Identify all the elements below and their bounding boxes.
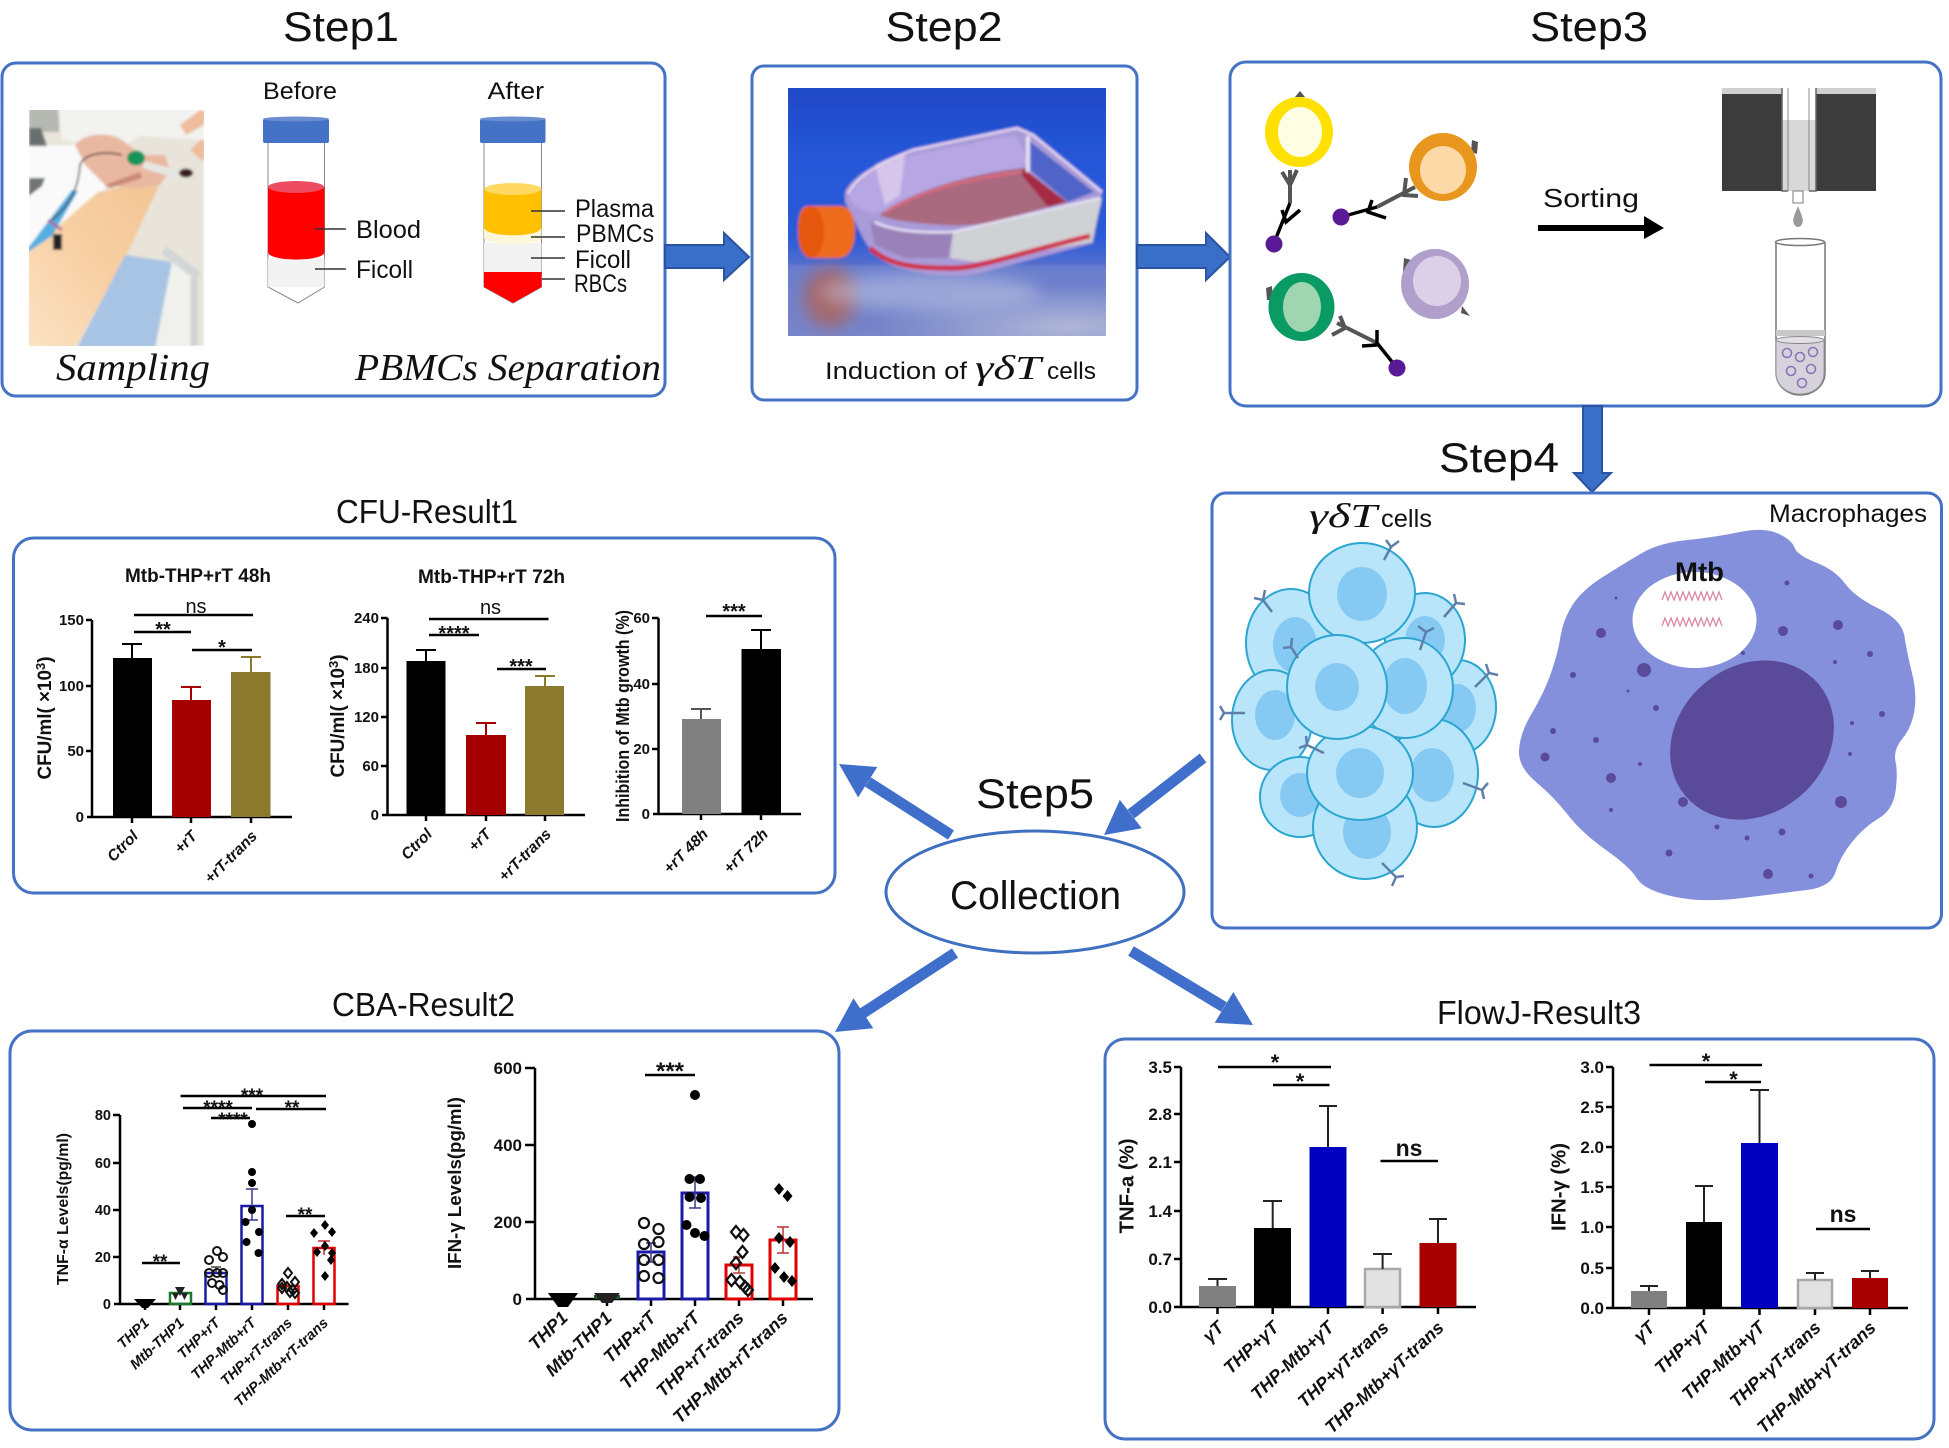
- chart: TNF-alpha levels: 80: [95, 1108, 111, 1124]
- chart: TNF-a percent: 3.5: [1148, 1058, 1172, 1077]
- panel: CBA results: [10, 1031, 839, 1430]
- chart: IFN-gamma percent: *: [1702, 1049, 1711, 1074]
- chart: TNF-alpha levels: 20: [95, 1250, 111, 1266]
- chart: Inhibition of Mtb growth: Inhibition of Mtb growth (%): [613, 610, 633, 822]
- chart: Mtb-THP+rT 48h: 0: [76, 809, 84, 826]
- chart: IFN-gamma levels: Mtb-THP1: [541, 1307, 616, 1380]
- heading: CFU-Result1: CFU-Result1: [336, 493, 518, 530]
- title: Step3: Step3: [1530, 3, 1648, 50]
- chart: TNF-a percent: ns: [1396, 1135, 1422, 1161]
- chart: TNF-alpha levels: THP1: [115, 1315, 153, 1352]
- chart: IFN-gamma percent: ns: [1830, 1201, 1856, 1227]
- chart: TNF-alpha levels: [55, 1086, 348, 1410]
- chart: Mtb-THP+rT 72h: ***: [509, 656, 533, 678]
- chart: Inhibition of Mtb growth: 20: [633, 741, 650, 758]
- arrow: Step3 to Step4: [1574, 406, 1611, 492]
- chart: TNF-alpha levels: THP+rT: [175, 1314, 225, 1362]
- icon: collection test tube: [1776, 238, 1825, 395]
- chart: IFN-gamma percent: γT: [1630, 1316, 1660, 1346]
- cap: [798, 206, 855, 258]
- icon: yellow stained cell with antibody: [1265, 91, 1333, 252]
- panel: Step3 sorting: [1230, 62, 1941, 406]
- labels: tube layers with leader lines: Ficoll: [575, 246, 631, 274]
- chart: Mtb-THP+rT 72h: ): [328, 655, 349, 661]
- icon: purple unstained cell: [1401, 249, 1470, 319]
- chart: TNF-a percent: γT: [1199, 1316, 1229, 1346]
- label: gamma delta T cells: cells: [1381, 505, 1432, 533]
- labels: tube layers with leader lines: PBMCs: [576, 220, 654, 248]
- illustration: T cell cluster: [1220, 540, 1498, 886]
- chart: TNF-alpha levels: **: [285, 1098, 300, 1119]
- chart: Mtb-THP+rT 72h: 180: [354, 660, 379, 677]
- label: Mtb: Mtb: [1675, 557, 1724, 587]
- chart: Mtb-THP+rT 48h: Ctrol: [104, 827, 142, 865]
- chart: Inhibition of Mtb growth: ***: [722, 601, 746, 623]
- chart: IFN-gamma percent: IFN-γ (%): [1548, 1143, 1570, 1231]
- label: gamma delta T cells: [1309, 498, 1432, 535]
- chart: Inhibition of Mtb growth: [613, 601, 801, 877]
- chart: TNF-a percent: THP+γT-trans: [1294, 1317, 1393, 1411]
- chart: Inhibition of Mtb growth: 40: [633, 676, 650, 693]
- chart: IFN-gamma levels: THP+rT-trans: [652, 1307, 748, 1401]
- chart: Mtb-THP+rT 72h: Mtb-THP+rT 72h: [418, 566, 565, 588]
- chart: Mtb-THP+rT 72h: ns: [480, 597, 501, 619]
- icon: green stained cell with antibody: [1266, 273, 1406, 376]
- vacuole: [1632, 572, 1756, 668]
- node: Collection ellipse: Collection: [950, 874, 1121, 918]
- label: gamma delta T cells: γδT: [1309, 498, 1380, 535]
- chart: TNF-a percent: 0.7: [1148, 1250, 1172, 1269]
- icon: Before tube: [263, 116, 329, 303]
- chart: TNF-alpha levels: THP-Mtb+rT: [188, 1314, 261, 1383]
- chart: IFN-gamma levels: THP+rT: [599, 1306, 661, 1367]
- chart: IFN-gamma levels: IFN-γ Levels(pg/ml): [445, 1097, 465, 1269]
- arrow: Step1 to Step2: [665, 233, 749, 280]
- chart: IFN-gamma percent: THP-Mtb+γT: [1678, 1316, 1770, 1404]
- caption: Induction of gamma delta T cells: γδT: [975, 350, 1044, 387]
- heading: CBA-Result2: CBA-Result2: [332, 986, 515, 1023]
- chart: Mtb-THP+rT 48h: 3: [33, 663, 48, 670]
- caption: Sampling: Sampling: [56, 347, 210, 389]
- panel: Step4 co-culture cells: [1212, 493, 1942, 928]
- label: Macrophages: Macrophages: [1769, 500, 1927, 528]
- arrow: sorting: [1538, 216, 1664, 239]
- chart: Mtb-THP+rT 48h: ): [35, 657, 56, 663]
- chart: IFN-gamma levels: [445, 1058, 813, 1427]
- photo: blood sampling from arm: [28, 108, 206, 348]
- chart: IFN-gamma percent: 0.5: [1580, 1259, 1604, 1278]
- chart: IFN-gamma levels: 600: [494, 1059, 522, 1078]
- receptors on T cells: [1220, 540, 1498, 886]
- chart: Mtb-THP+rT 48h: Mtb-THP+rT 48h: [125, 565, 271, 587]
- chart: TNF-a percent: *: [1296, 1069, 1305, 1094]
- chart: Mtb-THP+rT 48h: 100: [59, 678, 84, 695]
- chart: TNF-a percent: TNF-a (%): [1116, 1138, 1138, 1234]
- chart: IFN-gamma percent: 1.5: [1580, 1178, 1604, 1197]
- panel: Step1 sampling and PBMC separation: [2, 63, 665, 396]
- labels: tube layers with leader lines: Blood: [356, 216, 421, 244]
- chart: IFN-gamma percent: [1548, 1049, 1908, 1437]
- chart: Mtb-THP+rT 48h: ns: [185, 596, 207, 618]
- chart: TNF-alpha levels: Mtb-THP1: [127, 1315, 188, 1373]
- chart: Mtb-THP+rT 72h: 3: [326, 661, 341, 668]
- icon: cell sorter nozzle: [1722, 88, 1876, 227]
- chart: TNF-alpha levels: **: [153, 1252, 168, 1273]
- chart: TNF-alpha levels: ****: [203, 1098, 233, 1119]
- chart: Mtb-THP+rT 72h: [326, 566, 585, 885]
- chart: TNF-alpha levels: ****: [218, 1110, 248, 1131]
- labels: tube layers with leader lines: [315, 195, 654, 298]
- chart: IFN-gamma percent: THP-Mtb+γT-trans: [1753, 1317, 1880, 1437]
- chart: Mtb-THP+rT 48h: CFU/ml( ×10: [35, 669, 56, 780]
- panel: CFU results: [14, 538, 835, 893]
- chart: Mtb-THP+rT 48h: [33, 565, 292, 887]
- chart: TNF-a percent: THP-Mtb+γT-trans: [1321, 1317, 1448, 1437]
- arrow: Step2 to Step3: [1137, 233, 1230, 280]
- chart: IFN-gamma percent: THP+γT: [1651, 1316, 1715, 1378]
- icon: After tube: [480, 116, 546, 303]
- chart: IFN-gamma levels: ***: [656, 1058, 685, 1085]
- chart: IFN-gamma levels: 200: [494, 1213, 522, 1232]
- chart: IFN-gamma percent: THP+γT-trans: [1726, 1317, 1825, 1411]
- chart: Inhibition of Mtb growth: +rT 48h: [661, 826, 712, 877]
- title: Step4: Step4: [1439, 434, 1559, 481]
- chart: TNF-alpha levels: THP-Mtb+rT-trans: [232, 1315, 332, 1410]
- caption: Induction of gamma delta T cells: [825, 350, 1096, 387]
- chart: Mtb-THP+rT 72h: 120: [354, 709, 379, 726]
- chart: IFN-gamma levels: THP-Mtb+rT-trans: [669, 1307, 792, 1427]
- labels: tube headings: After: [488, 78, 544, 105]
- chart: TNF-a percent: [1116, 1050, 1476, 1437]
- caption: Induction of gamma delta T cells: Induction of: [825, 358, 967, 385]
- labels: tube headings: [263, 78, 544, 105]
- chart: TNF-a percent: 0.0: [1148, 1298, 1172, 1317]
- chart: IFN-gamma percent: 2.5: [1580, 1098, 1604, 1117]
- caption: Induction of gamma delta T cells: cells: [1047, 358, 1096, 385]
- illustration: infected macrophage: [1519, 530, 1915, 900]
- chart: IFN-gamma percent: *: [1729, 1067, 1738, 1092]
- chart: Mtb-THP+rT 72h: 60: [362, 758, 379, 775]
- chart: TNF-alpha levels: 0: [103, 1297, 111, 1313]
- title: Step2: Step2: [886, 3, 1002, 50]
- label: Sorting: Sorting: [1543, 183, 1639, 213]
- chart: TNF-alpha levels: **: [298, 1205, 313, 1226]
- chart: Mtb-THP+rT 72h: ****: [438, 623, 470, 645]
- arrow: collection to FlowJ result: [1131, 951, 1253, 1025]
- chart: TNF-a percent: 1.4: [1148, 1202, 1173, 1221]
- chart: Mtb-THP+rT 48h: *: [218, 637, 226, 659]
- photo: culture flask: [786, 86, 1108, 338]
- labels: tube headings: Before: [263, 78, 337, 105]
- chart: IFN-gamma percent: 3.0: [1580, 1058, 1604, 1077]
- chart: IFN-gamma percent: 0.0: [1580, 1299, 1604, 1318]
- chart: IFN-gamma levels: 0: [513, 1290, 522, 1309]
- chart: Mtb-THP+rT 72h: CFU/ml( ×10: [328, 667, 349, 778]
- panel: FlowJ results: [1105, 1039, 1934, 1439]
- chart: IFN-gamma percent: 1.0: [1580, 1218, 1604, 1237]
- title: Step5: Step5: [976, 770, 1094, 817]
- chart: Inhibition of Mtb growth: 0: [642, 806, 650, 823]
- heading: FlowJ-Result3: FlowJ-Result3: [1437, 994, 1641, 1031]
- chart: Mtb-THP+rT 48h: 150: [59, 612, 84, 629]
- labels: tube layers with leader lines: RBCs: [574, 270, 627, 298]
- flask body: [845, 128, 1102, 276]
- nucleus: [1638, 627, 1866, 853]
- cytoplasmic granules: [1540, 580, 1885, 879]
- chart: Mtb-THP+rT 72h: 240: [354, 610, 379, 627]
- caption: PBMCs Separation: PBMCs Separation: [354, 347, 661, 389]
- chart: Mtb-THP+rT 48h: **: [155, 619, 171, 641]
- chart: TNF-a percent: 2.1: [1148, 1153, 1172, 1172]
- chart: Mtb-THP+rT 72h: +rT: [465, 825, 496, 855]
- chart: TNF-alpha levels: 60: [95, 1156, 111, 1172]
- chart: TNF-a percent: THP-Mtb+γT: [1247, 1316, 1339, 1404]
- chart: TNF-alpha levels: TNF-α Levels(pg/ml): [55, 1133, 72, 1285]
- panel: Step2 induction: [752, 66, 1137, 400]
- chart: Mtb-THP+rT 72h: +rT-trans: [496, 826, 555, 885]
- chart: IFN-gamma percent: 2.0: [1580, 1138, 1604, 1157]
- labels: tube layers with leader lines: Ficoll: [356, 256, 413, 284]
- chart: Inhibition of Mtb growth: 60: [633, 610, 650, 627]
- icon: Mtb bacilli: [1662, 592, 1722, 626]
- icon: orange stained cell with antibody: [1332, 133, 1478, 226]
- chart: Inhibition of Mtb growth: +rT 72h: [721, 826, 772, 877]
- chart: IFN-gamma levels: THP-Mtb+rT: [616, 1306, 705, 1393]
- chart: Mtb-THP+rT 72h: 0: [371, 807, 379, 824]
- chart: TNF-a percent: 2.8: [1148, 1105, 1172, 1124]
- chart: IFN-gamma levels: THP1: [525, 1307, 572, 1354]
- labels: tube layers with leader lines: Plasma: [575, 195, 654, 223]
- chart: Mtb-THP+rT 72h: Ctrol: [398, 825, 436, 863]
- chart: TNF-a percent: *: [1271, 1050, 1280, 1075]
- title: Step1: Step1: [283, 3, 399, 50]
- arrow: collection to CBA result: [835, 953, 955, 1032]
- chart: TNF-a percent: THP+γT: [1220, 1316, 1284, 1378]
- chart: Mtb-THP+rT 48h: 50: [67, 743, 84, 760]
- chart: Mtb-THP+rT 48h: +rT-trans: [202, 828, 261, 887]
- chart: Mtb-THP+rT 48h: +rT: [171, 827, 202, 857]
- node: Collection ellipse: [886, 831, 1184, 953]
- chart: TNF-alpha levels: 40: [95, 1203, 111, 1219]
- chart: TNF-alpha levels: THP+rT-trans: [218, 1315, 296, 1389]
- chart: TNF-alpha levels: ***: [241, 1086, 264, 1107]
- arrow: macrophage panel to collection: [1104, 758, 1203, 835]
- arrow: collection to CFU result: [839, 764, 951, 835]
- chart: IFN-gamma levels: 400: [494, 1136, 522, 1155]
